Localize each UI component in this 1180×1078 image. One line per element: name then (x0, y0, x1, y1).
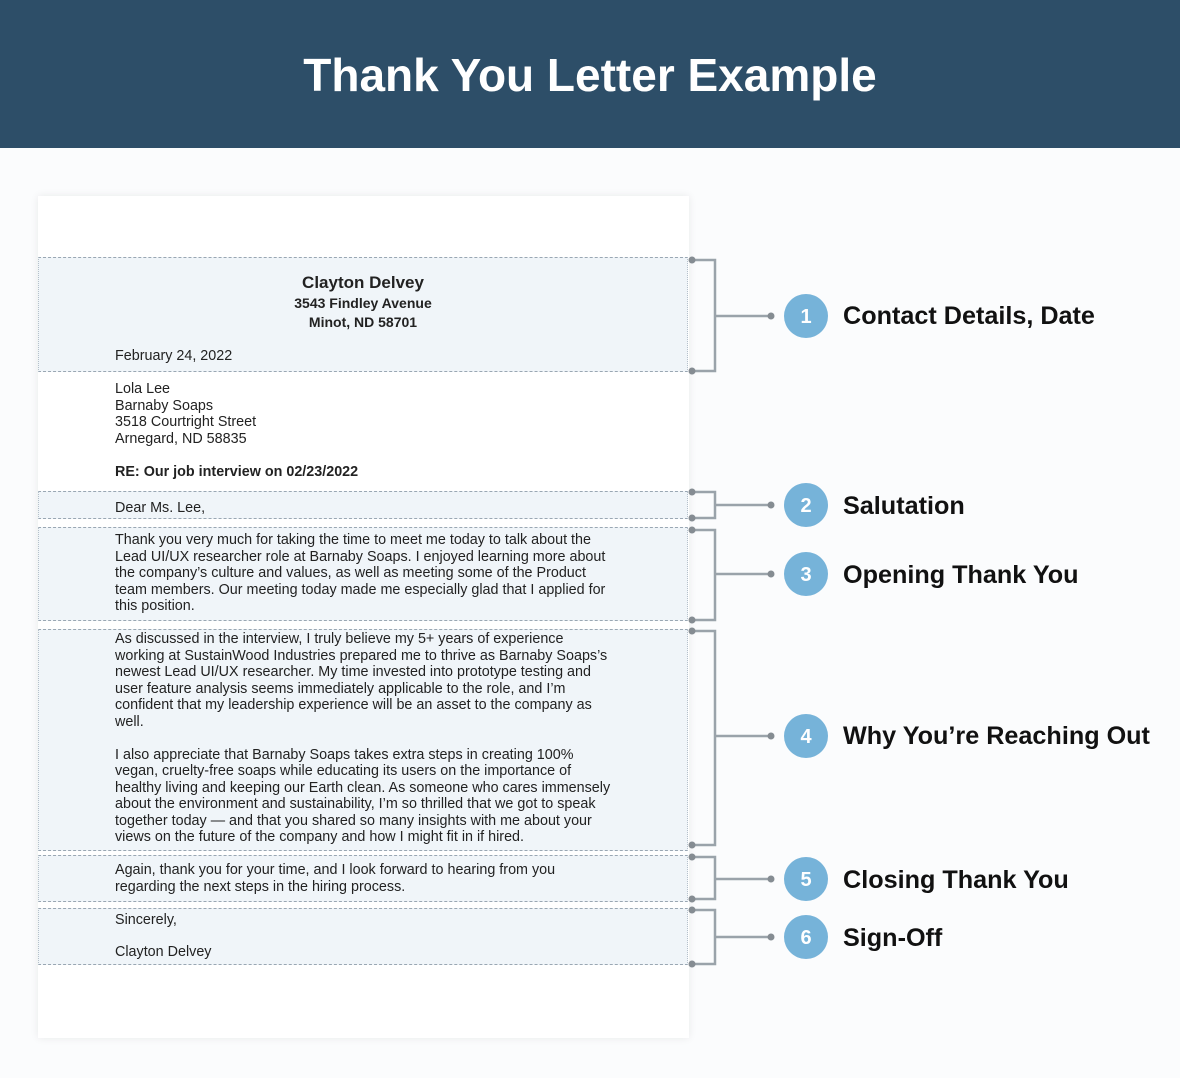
label 2: Salutation (843, 492, 965, 520)
recipient: Arnegard, ND 58835 (115, 431, 247, 447)
recipient (115, 381, 256, 447)
body paragraphs: newest Lead UI/UX researcher. My time invested into prototype testing and (115, 664, 591, 680)
section 2 highlight (38, 491, 688, 519)
brackets and connectors: 1 (800, 306, 812, 328)
label 4: Why You’re Reaching Out (843, 722, 1150, 750)
body paragraphs: well. (115, 714, 144, 730)
opening paragraph: Thank you very much for taking the time to meet me today to talk about the (115, 532, 591, 548)
recipient: 3518 Courtright Street (115, 414, 256, 430)
closing paragraph: regarding the next steps in the hiring process. (115, 878, 405, 894)
brackets and connectors: 2 (800, 495, 812, 517)
subject line: RE: Our job interview on 02/23/2022 (115, 464, 358, 480)
opening paragraph: Lead UI/UX researcher role at Barnaby Soaps. I enjoyed learning more about (115, 548, 605, 564)
brackets and connectors: 5 (800, 869, 812, 891)
body paragraphs: together today — and that you shared so many insights with me about your (115, 812, 592, 828)
section 3 highlight (38, 527, 688, 621)
label 6: Sign-Off (843, 924, 942, 952)
salutation: Dear Ms. Lee, (115, 500, 205, 516)
closing paragraph: Again, thank you for your time, and I look forward to hearing from you (115, 862, 555, 878)
opening paragraph: this position. (115, 598, 195, 614)
letter paper (38, 196, 689, 1038)
title: Thank You Letter Example (303, 49, 877, 101)
sign-off (115, 912, 212, 960)
body paragraphs: I also appreciate that Barnaby Soaps takes extra steps in creating 100% (115, 746, 573, 762)
sender block: Clayton Delvey (302, 273, 424, 292)
body paragraphs: about the environment and sustainability, I’m so thrilled that we got to speak (115, 796, 596, 812)
label 3: Opening Thank You (843, 561, 1079, 589)
section 4 highlight (38, 629, 688, 851)
sender block (294, 273, 432, 330)
sender block: Minot, ND 58701 (309, 314, 417, 330)
body paragraphs: views on the future of the company and how I might fit in if hired. (115, 829, 524, 845)
label 5: Closing Thank You (843, 866, 1069, 894)
section 1 highlight (38, 257, 688, 372)
closing paragraph (115, 862, 555, 894)
opening paragraph: team members. Our meeting today made me especially glad that I applied for (115, 582, 605, 598)
section 5 highlight (38, 855, 688, 902)
opening paragraph (115, 532, 606, 614)
header banner (0, 0, 1180, 148)
section 6 highlight (38, 908, 688, 965)
recipient: Lola Lee (115, 381, 170, 397)
body paragraphs: healthy living and keeping our Earth clean. As someone who cares immensely (115, 780, 610, 796)
body paragraphs: As discussed in the interview, I truly believe my 5+ years of experience (115, 631, 563, 647)
body paragraphs: user feature analysis seems immediately applicable to the role, and I’m (115, 680, 565, 696)
recipient: Barnaby Soaps (115, 398, 213, 414)
body paragraphs: working at SustainWood Industries prepared me to thrive as Barnaby Soaps’s (115, 648, 607, 664)
date: February 24, 2022 (115, 348, 232, 364)
sender block: 3543 Findley Avenue (294, 295, 432, 311)
body paragraphs (115, 631, 610, 845)
body paragraphs: confident that my leadership experience will be an asset to the company as (115, 697, 592, 713)
brackets and connectors: 4 (800, 726, 812, 748)
opening paragraph: the company’s culture and values, as well as meeting some of the Product (115, 565, 586, 581)
brackets and connectors: 6 (800, 927, 812, 949)
body paragraphs: vegan, cruelty-free soaps while educating its users on the importance of (115, 763, 571, 779)
brackets and connectors: 3 (800, 564, 812, 586)
label 1: Contact Details, Date (843, 302, 1095, 330)
sign-off: Sincerely, (115, 912, 177, 928)
sign-off: Clayton Delvey (115, 944, 211, 960)
